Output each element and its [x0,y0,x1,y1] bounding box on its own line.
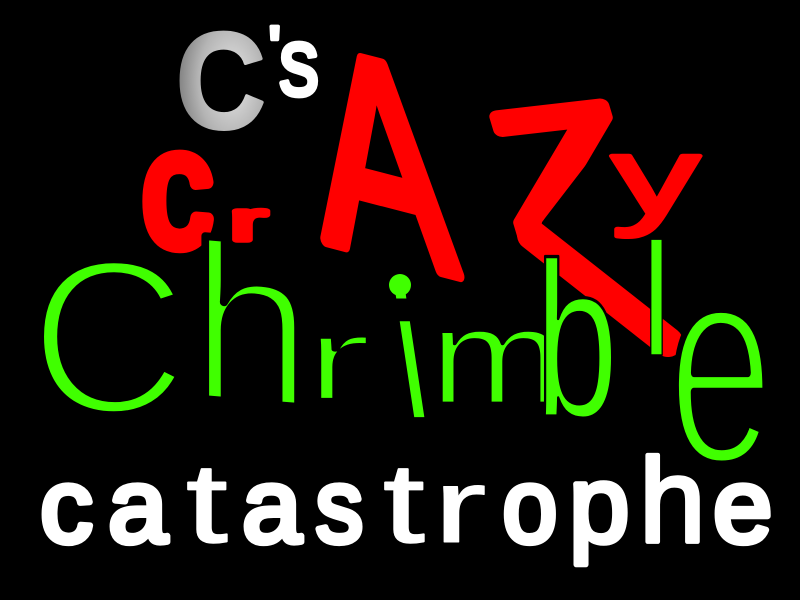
heading: catastrophe in white: o [503,447,557,565]
heading: Chrimble in green: i [380,251,440,458]
heading: catastrophe in white: t [383,441,425,567]
heading: Chrimble in green: m [430,282,563,432]
heading: C's: C [176,4,266,157]
heading: Chrimble in green: l [642,210,671,389]
heading: C's: s [279,8,319,116]
heading: crazy in red: Z [473,68,658,272]
heading: catastrophe in white: e [713,447,772,565]
heading: C's: ' [268,14,281,81]
heading: Chrimble in green: h [190,195,312,456]
heading: catastrophe in white: a [108,447,168,565]
heading: catastrophe in white: p [569,444,630,566]
heading: catastrophe in white: t [186,441,228,567]
heading: catastrophe in white: h [639,435,705,568]
heading: Chrimble in green: e [668,205,774,523]
heading: crazy in red: c [142,96,212,281]
heading: catastrophe in white: c [40,448,93,565]
heading: catastrophe in white: s [316,448,363,565]
heading: catastrophe in white: a [242,447,302,565]
heading: Chrimble in green: C [29,214,188,460]
heading: Chrimble in green: r [303,292,373,426]
heading: catastrophe in white: r [433,447,487,565]
heading: crazy in red: r [230,191,267,252]
heading: Chrimble in green: b [535,217,618,463]
heading: Chrimble in green [29,195,774,523]
heading: crazy in red: y [612,115,699,237]
heading: crazy in red [142,53,703,357]
heading: C's [176,4,319,157]
heading: catastrophe in white [40,435,772,568]
